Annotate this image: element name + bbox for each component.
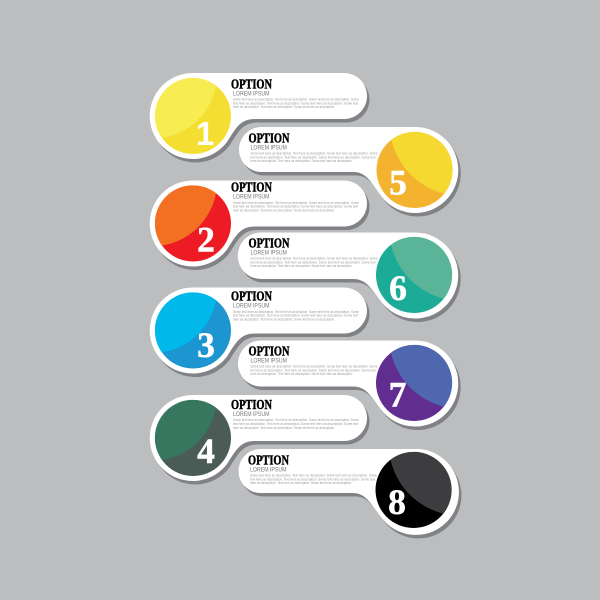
panel: option 1 <box>150 73 370 162</box>
panel: option 2 <box>150 180 370 270</box>
panel: option 4: Some text here as description. Text here as description. Some text here as description. Some <box>233 418 359 422</box>
panel: option 3 <box>150 287 370 377</box>
panel: option 8: LOREM IPSUM <box>250 467 286 473</box>
panel: option 2: 2 <box>197 220 215 260</box>
panel: option 1: here as description. Text here as description. Some text here as description. <box>233 105 335 109</box>
panel: option 7: text here as description. Text here as description. Some text here as description. Some text <box>250 368 376 372</box>
panel: option 4: here as description. Text here as description. Some text here as description. <box>233 426 335 430</box>
panel: option 2: OPTION <box>231 180 272 195</box>
panel: option 3: LOREM IPSUM <box>233 304 270 310</box>
panel: option 5 <box>239 127 461 216</box>
panel: option 3: here as description. Text here as description. Some text here as description. <box>233 318 335 322</box>
panel: option 4: OPTION <box>231 397 272 412</box>
panel: option 6: text here as description. Text here as description. Some text here as description. Some text <box>250 260 376 264</box>
panel: option 3: Some text here as description. Text here as description. Some text here as description. Some <box>233 310 359 314</box>
panel: option 1: Some text here as description. Text here as description. Some text here as description. Some <box>233 97 359 101</box>
panel: option 6: OPTION <box>248 235 290 250</box>
panel: option 2: here as description. Text here as description. Some text here as description. <box>233 208 335 212</box>
panel: option 7 <box>238 340 461 430</box>
panel: option 3: OPTION <box>231 289 272 304</box>
panel: option 8: OPTION <box>248 452 289 467</box>
panel: option 7: Some text here as description. Text here as description. Some text here as description. Some <box>250 364 378 368</box>
panel: option 4: 4 <box>197 431 215 471</box>
panel: option 8: Some text here as description. Text here as description. Some text here as description. Some <box>250 473 377 477</box>
panel: option 8: text here as description. Text here as description. Some text here as description. Some text <box>250 477 375 481</box>
panel: option 4: LOREM IPSUM <box>233 412 270 418</box>
panel: option 6: 6 <box>389 268 407 308</box>
panel: option 3: text here as description. Text here as description. Some text here as description. Some text <box>233 314 358 318</box>
panel: option 6: Some text here as description. Text here as description. Some text here as description. Some <box>250 256 378 260</box>
panel: option 5: Some text here as description. Text here as description. Some text here as description. Some <box>250 151 378 155</box>
panel: option 5: OPTION <box>248 130 290 145</box>
panel: option 2: text here as description. Text here as description. Some text here as description. Some text <box>233 205 358 209</box>
panel: option 8 <box>238 449 461 538</box>
panel: option 7: OPTION <box>248 343 290 358</box>
panel: option 2: LOREM IPSUM <box>233 195 270 201</box>
panel: option 7: LOREM IPSUM <box>250 358 287 364</box>
panel: option 3: 3 <box>197 325 215 365</box>
panel: option 6: here as description. Text here as description. Some text here as description. <box>250 264 353 268</box>
panel: option 8: here as description. Text here as description. Some text here as description. <box>250 481 352 485</box>
panel: option 1: text here as description. Text here as description. Some text here as description. Some text <box>233 101 358 105</box>
panel: option 5: text here as description. Text here as description. Some text here as description. Some text <box>250 155 376 159</box>
panel: option 6: LOREM IPSUM <box>250 250 287 256</box>
panel: option 1: OPTION <box>231 76 272 91</box>
panel: option 6 <box>238 232 461 322</box>
panel: option 5: 5 <box>389 162 407 202</box>
panel: option 7: 7 <box>389 375 406 415</box>
panel: option 4 <box>150 395 370 484</box>
panel: option 2: Some text here as description. Text here as description. Some text here as description. Some <box>233 201 359 205</box>
panel: option 8: 8 <box>388 482 406 522</box>
panel: option 5: LOREM IPSUM <box>250 145 287 151</box>
panel: option 1: LOREM IPSUM <box>233 91 270 97</box>
panel: option 1: 1 <box>196 115 214 152</box>
panel: option 5: here as description. Text here as description. Some text here as description. <box>250 159 353 163</box>
panel: option 4: text here as description. Text here as description. Some text here as description. Some text <box>233 422 358 426</box>
panel: option 7: here as description. Text here as description. Some text here as description. <box>250 372 353 376</box>
